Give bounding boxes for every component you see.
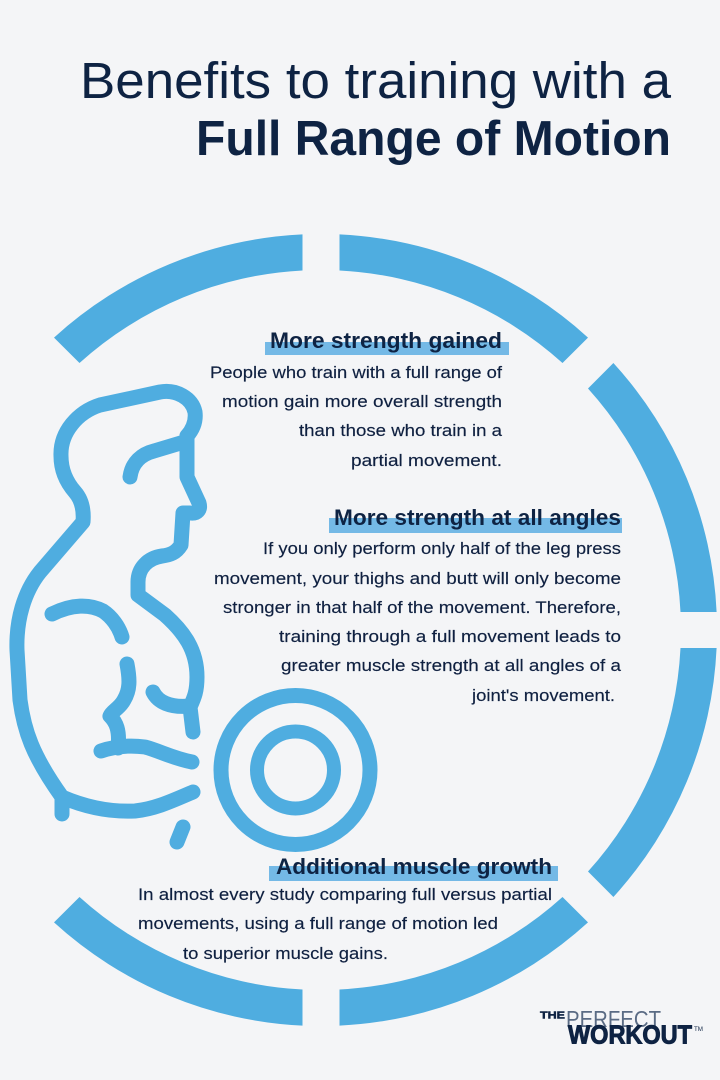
highlight bar <box>265 342 509 355</box>
heading: More strength gained <box>270 328 502 353</box>
logo: The Perfect Workout: WORKOUT <box>568 1020 692 1050</box>
body text: than those who train in a <box>299 421 503 440</box>
icon: joint target circles <box>221 696 370 844</box>
body text: movements, using a full range of motion led <box>138 914 498 933</box>
body text: If you only perform only half of the leg press <box>263 539 621 558</box>
segmented ring <box>54 234 717 1026</box>
body text: partial movement. <box>351 451 502 470</box>
body text: to superior muscle gains. <box>183 944 388 963</box>
body text: joint's movement. <box>471 686 615 705</box>
text block: additional muscle growth <box>138 854 558 963</box>
logo: The Perfect Workout: TM <box>694 1027 703 1033</box>
logo: The Perfect Workout: PERFECT <box>566 1006 661 1032</box>
title: Benefits to training with a <box>80 52 672 109</box>
text block: more strength at all angles <box>214 505 622 705</box>
title: Full Range of Motion <box>196 112 671 166</box>
body text: motion gain more overall strength <box>222 392 502 411</box>
body text: greater muscle strength at all angles of a <box>281 656 622 675</box>
body text: In almost every study comparing full versus partial <box>138 885 552 904</box>
body text <box>210 363 503 470</box>
body text <box>138 885 552 963</box>
heading: More strength at all angles <box>334 505 621 530</box>
body text: movement, your thighs and butt will only become <box>214 569 621 588</box>
highlight bar <box>269 866 558 881</box>
logo: The Perfect Workout: THE <box>540 1010 565 1022</box>
body text <box>214 539 622 705</box>
body text: People who train with a full range of <box>210 363 502 382</box>
text block: more strength gained <box>210 328 509 470</box>
logo: The Perfect Workout <box>540 1006 703 1050</box>
title <box>80 52 672 166</box>
heading: Additional muscle growth <box>276 854 552 879</box>
body text: training through a full movement leads to <box>279 627 621 646</box>
body text: stronger in that half of the movement. Therefore, <box>223 598 621 617</box>
highlight bar <box>329 518 622 533</box>
icon: muscular torso outline <box>17 391 200 842</box>
